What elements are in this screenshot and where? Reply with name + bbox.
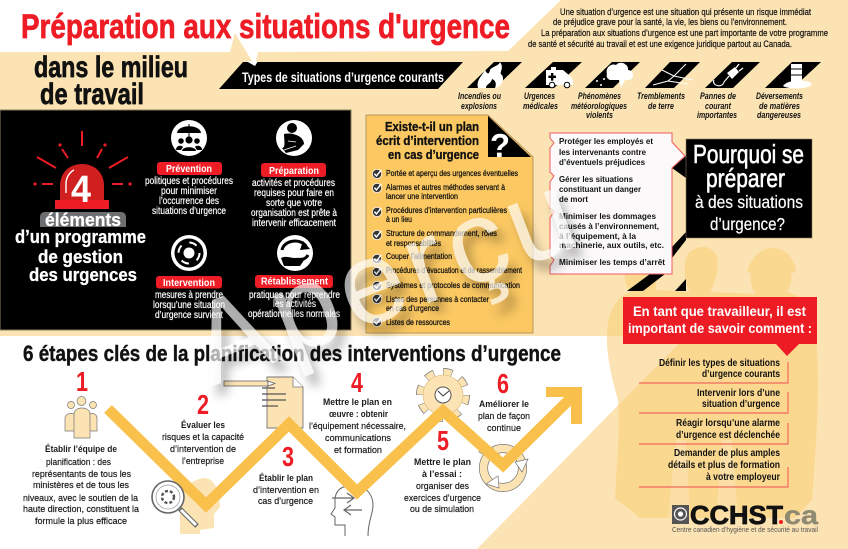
icon: team — [65, 396, 97, 438]
icon: clock — [435, 387, 451, 403]
label: recovery: les activités — [273, 299, 316, 310]
step 2: d’intervention de — [170, 444, 236, 455]
heading: elements: éléments — [45, 210, 121, 230]
logo: CCHST — [690, 500, 783, 530]
subtitle: dans le milieu — [34, 51, 188, 84]
step 2: l’entreprise — [182, 456, 224, 467]
step 3: cas d’urgence — [258, 496, 313, 507]
label: preparation: sorte que votre — [266, 198, 322, 209]
step 4: l’équipement nécessaire, — [309, 421, 406, 432]
step 4: communications — [325, 433, 391, 444]
checklist: à un lieu — [386, 214, 412, 224]
step 1: haute direction, constituent la — [23, 504, 140, 515]
panel: reasons list: les intervenants contre — [559, 147, 646, 157]
label: preparation: organisation est prête à — [251, 208, 337, 219]
step 3: Établir le plan — [259, 473, 313, 484]
watermark: Aperçu — [172, 145, 592, 410]
icon labels: météorologiques — [571, 101, 627, 111]
icon: plug — [705, 62, 760, 88]
checklist: Systèmes et protocoles de communication — [386, 280, 520, 290]
intro text — [528, 7, 828, 49]
step 5: à l’essai : — [422, 469, 462, 480]
callout: as a worker — [623, 297, 817, 356]
icon labels: Pannes de — [700, 91, 736, 101]
checklist: Listes des personnes à contacter — [386, 294, 489, 304]
icon labels — [458, 91, 803, 120]
logo — [672, 500, 819, 534]
step 5: 5 — [437, 425, 449, 456]
panel: reasons list: machinerie, aux outils, etc. — [559, 240, 664, 250]
checklist: Portée et aperçu des urgences éventuelles — [386, 168, 518, 178]
icon: siren: 4 — [71, 169, 91, 211]
worker silhouettes — [607, 247, 818, 518]
heading: six steps: 6 étapes clés de la planification des interventions d’urgence — [23, 341, 561, 366]
icon labels: Phénomènes — [578, 91, 621, 101]
icon labels: violents — [586, 110, 613, 120]
list: worker knowledge: d’urgence est déclenchée — [676, 430, 780, 441]
checklist: Alarmes et autres méthodes servant à — [386, 182, 505, 192]
white lower background — [0, 336, 686, 549]
callout: why prepare — [672, 139, 812, 238]
label: preparation: intervenir efficacement — [252, 218, 336, 229]
label: recovery — [248, 275, 340, 320]
subtitle — [34, 51, 188, 111]
icon: head silhouette behind magnifier — [180, 478, 220, 534]
step 5: exercices d’urgence — [404, 493, 481, 504]
banner: types of emergencies: Types de situations d’urgence courants — [242, 69, 444, 85]
logo: Centre canadien d’hygiène et de sécurité au travail — [672, 525, 818, 534]
step 1: ministères et de tous les — [33, 480, 129, 491]
icon: preparation — [276, 120, 312, 156]
title: Préparation aux situations d'urgence — [21, 8, 510, 46]
icon: siren — [33, 131, 132, 211]
label: preparation: Préparation — [269, 165, 319, 177]
chart: zigzag arrow — [108, 387, 582, 505]
step 2 — [162, 389, 244, 467]
step 6: Améliorer le — [479, 399, 529, 410]
step 1: Établir l’équipe de — [45, 444, 117, 455]
checklist: Couper l’alimentation — [386, 251, 452, 261]
intro text: de préjudice grave pour la santé, la vie, les biens ou l’environnement. — [553, 17, 787, 27]
step 6: continue — [487, 423, 521, 434]
heading: elements: d’un programme — [15, 227, 146, 247]
icon: cycle — [479, 448, 528, 488]
label: preparation: activités et procédures — [252, 178, 335, 189]
intro text: de santé et sécurité au travail et est une exigence juridique partout au Canada. — [528, 39, 792, 49]
icon labels: de matières — [759, 101, 800, 111]
icon: intervention — [171, 235, 207, 271]
list: worker knowledge: Demander de plus amples — [674, 448, 780, 459]
list: worker knowledge: Réagir lorsqu’une alarme — [676, 418, 780, 429]
label: prevention: Prévention — [166, 163, 212, 175]
step 1: formule la plus efficace — [35, 516, 127, 527]
callout: why prepare: Pourquoi se — [693, 139, 804, 169]
checklist: Structure de commandement, rôles — [386, 228, 497, 238]
icon: earthquake crack — [645, 62, 700, 88]
callout: as a worker: En tant que travailleur, il est — [633, 303, 806, 319]
subtitle: de travail — [40, 78, 144, 111]
icon: storm cloud — [585, 62, 640, 88]
icon labels: explosions — [461, 101, 497, 111]
label: intervention: lorsqu’une situation — [153, 300, 225, 311]
step 3: d’intervention en — [253, 485, 319, 496]
icon: ambulance — [525, 62, 582, 88]
heading: plan — [376, 119, 479, 162]
panel: reasons list: constituant un danger — [559, 184, 642, 194]
icon labels: Incendies ou — [458, 91, 501, 101]
step 2: Évaluer les — [181, 420, 225, 431]
panel: reasons list — [550, 133, 685, 274]
list: worker knowledge: Intervenir lors d’une — [697, 388, 780, 399]
step 1: planification : des — [46, 457, 111, 468]
icon: gear and clock — [420, 372, 466, 418]
list: worker knowledge: à votre employeur — [706, 472, 780, 483]
step 2: risques et la capacité — [162, 432, 244, 443]
icon labels: médicales — [523, 101, 558, 111]
label: prevention: politiques et procédures — [145, 176, 233, 187]
icon labels: courant — [705, 101, 732, 111]
black stripes behind panels — [627, 232, 686, 291]
label: recovery: pratiques pour reprendre — [249, 290, 340, 301]
checklist: Procédures d’intervention particulières — [386, 205, 507, 215]
step 4: œuvre : obtenir — [329, 409, 388, 420]
icon: question corner — [488, 116, 531, 164]
list: worker knowledge — [639, 358, 788, 487]
label: intervention — [153, 276, 225, 321]
label: preparation — [251, 163, 337, 229]
panel: reasons list: causés à l’environnement, — [559, 221, 659, 231]
list: worker knowledge: Définir les types de situations — [659, 358, 780, 369]
callout: why prepare: préparer — [706, 163, 785, 193]
label: prevention: l’occurrence des — [159, 196, 219, 207]
step 6 — [478, 368, 530, 434]
list: worker knowledge: situation d’urgence — [702, 399, 780, 410]
label: preparation: requises pour faire en — [254, 188, 334, 199]
step 4 — [309, 367, 406, 456]
icon labels: de terre — [648, 101, 674, 111]
logo: ca — [784, 500, 819, 530]
callout: why prepare: à des situations — [695, 192, 803, 212]
checklist — [372, 168, 522, 327]
step 4: et formation — [334, 445, 382, 456]
step 5: Mettre le plan — [414, 457, 471, 468]
step 2: 2 — [197, 389, 209, 420]
silhouette on white area — [606, 336, 678, 405]
panel: reasons list: d’éventuels préjudices — [559, 157, 645, 167]
checklist: Listes de ressources — [386, 317, 450, 327]
heading: plan: Existe-t-il un plan — [385, 119, 479, 134]
icon labels: importantes — [697, 110, 737, 120]
heading: elements: de gestion — [38, 247, 123, 267]
label: prevention: situations d’urgence — [152, 206, 226, 217]
checklist: et responsabilités — [386, 238, 441, 248]
icon labels: Déversements — [756, 91, 803, 101]
callout: as a worker: important de savoir comment : — [628, 320, 812, 336]
list: worker knowledge: détails et plus de formation — [668, 460, 780, 471]
panel: reasons list: Minimiser les temps d’arrêt — [559, 257, 665, 267]
label: recovery: Rétablissement — [261, 276, 328, 288]
banner: types of emergencies — [219, 61, 463, 89]
icon: head with arrows — [331, 486, 373, 536]
step 5: ou de simulation — [410, 504, 474, 515]
heading: plan: en cas d’urgence — [388, 147, 479, 162]
white title band — [0, 0, 561, 66]
callout: why prepare: d’urgence? — [710, 214, 785, 234]
icon: recovery — [277, 235, 313, 271]
checklist: en cas d’urgence — [386, 303, 439, 313]
icon: pen and document — [224, 377, 303, 428]
step 4: 4 — [351, 367, 363, 398]
step 6: plan de façon — [478, 411, 530, 422]
panel: reasons list: de mort — [559, 194, 588, 204]
step 1: niveaux, avec le soutien de la — [23, 493, 139, 504]
step 1: 1 — [76, 366, 88, 397]
icon: fire — [467, 62, 522, 88]
step 1 — [23, 366, 140, 527]
label: recovery: opérationnelles normales — [248, 309, 340, 320]
step 5: organiser des — [416, 481, 469, 492]
panel: reasons list: Protéger les employés et — [559, 136, 653, 146]
list: worker knowledge: d’urgence courants — [702, 369, 780, 380]
panel: reasons list: Minimiser les dommages — [559, 211, 656, 221]
step 6: 6 — [497, 368, 509, 399]
panel: four elements — [0, 110, 351, 330]
label: intervention: mesures à prendre — [155, 290, 223, 301]
label: prevention: pour minimiser — [161, 186, 218, 197]
panel: reasons list: à l’équipement, à la — [559, 231, 636, 241]
icon: barrel spill — [765, 62, 821, 88]
icon: question corner: ? — [490, 127, 510, 164]
heading: elements — [15, 210, 146, 285]
icon: magnifier — [152, 481, 197, 526]
icon labels: Tremblements — [637, 91, 685, 101]
heading: plan: écrit d’intervention — [376, 133, 479, 148]
step 4: Mettre le plan en — [323, 397, 392, 408]
icon labels: Urgences — [524, 91, 555, 101]
label: intervention: d’urgence survient — [155, 310, 223, 321]
intro text: Une situation d’urgence est une situation qui présente un risque immédiat — [560, 7, 811, 17]
icon: prevention — [171, 120, 207, 156]
step 3 — [253, 441, 319, 507]
step 1: représentants de tous les — [32, 469, 131, 480]
checklist: Procédures d’évacuation et de rassemblement — [386, 265, 522, 275]
step 3: 3 — [282, 441, 294, 472]
label: intervention: Intervention — [163, 277, 215, 289]
heading: elements: des urgences — [29, 265, 137, 285]
label: prevention — [145, 162, 233, 217]
icon labels: dangereuses — [757, 110, 801, 120]
checklist: lancer une intervention — [386, 191, 458, 201]
panel: written plan — [366, 115, 533, 333]
panel: reasons list: Gérer les situations — [559, 174, 633, 184]
step 5 — [404, 425, 481, 515]
